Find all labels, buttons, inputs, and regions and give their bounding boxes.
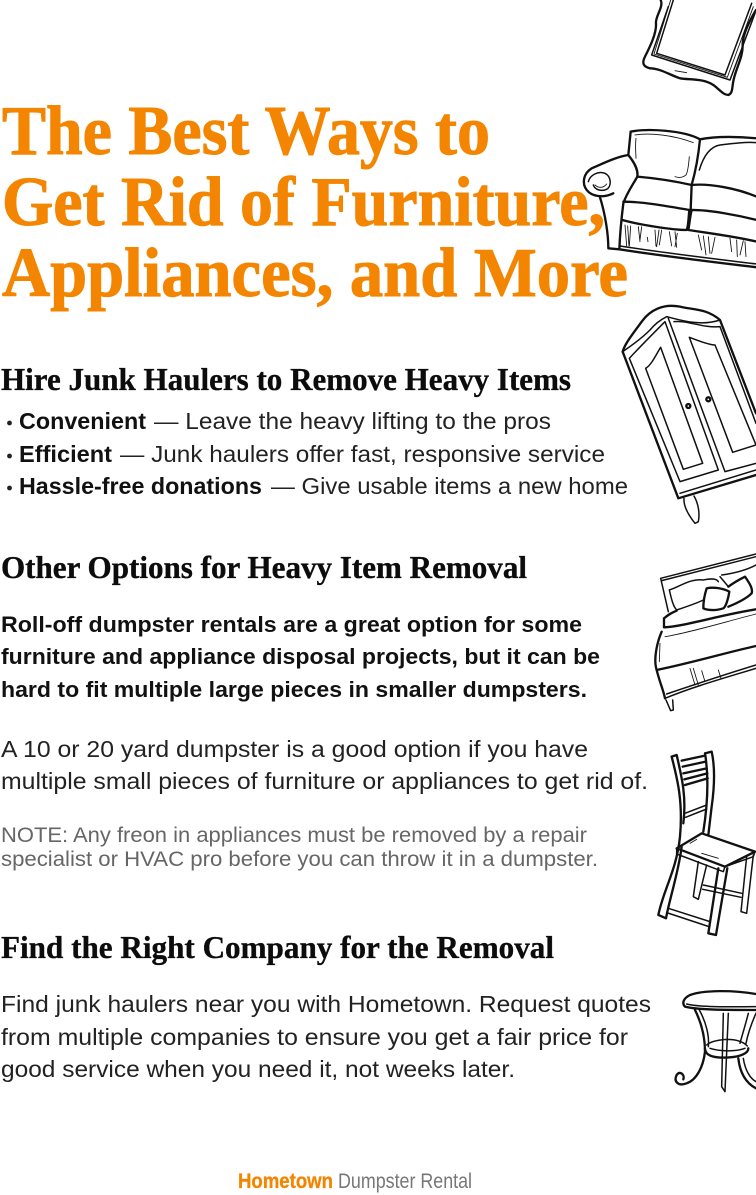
logo: Hometown <box>238 1170 333 1193</box>
heading: other options: Other Options for Heavy Item Removal <box>1 549 527 585</box>
icon: bed <box>655 554 756 711</box>
heading: find the right company: Find the Right Company for the Removal <box>1 929 554 965</box>
note: specialist or HVAC pro before you can throw it in a dumpster. <box>1 848 598 871</box>
section: find the right company <box>1 929 651 1082</box>
title <box>2 93 628 312</box>
paragraph <box>1 736 648 794</box>
bold paragraph: hard to fit multiple large pieces in smaller dumpsters. <box>1 677 587 702</box>
bullet list: — Leave the heavy lifting to the pros <box>154 408 551 434</box>
bullet list: Efficient <box>19 441 112 467</box>
icon: sofa <box>584 130 756 267</box>
title: Get Rid of Furniture, <box>2 164 605 241</box>
paragraph: from multiple companies to ensure you get a fair price for <box>1 1024 628 1050</box>
bullet list <box>7 408 628 499</box>
section: other options <box>1 549 648 871</box>
bold paragraph: Roll-off dumpster rentals are a great option for some <box>1 612 582 637</box>
paragraph: good service when you need it, not weeks later. <box>1 1056 515 1082</box>
bullet list: Hassle-free donations <box>19 473 262 499</box>
logo <box>238 1170 472 1193</box>
title: The Best Ways to <box>2 93 490 170</box>
bullet list: — Give usable items a new home <box>271 473 628 499</box>
note: NOTE: Any freon in appliances must be removed by a repair <box>1 824 587 847</box>
section: junk haulers <box>1 361 628 499</box>
paragraph <box>1 991 651 1082</box>
icon: chair <box>658 752 755 935</box>
paragraph: Find junk haulers near you with Hometown. Request quotes <box>1 991 651 1017</box>
title: Appliances, and More <box>2 235 628 312</box>
icon: wardrobe <box>623 306 756 523</box>
heading: hire junk haulers: Hire Junk Haulers to Remove Heavy Items <box>1 361 571 397</box>
logo: Dumpster Rental <box>338 1170 472 1193</box>
icon: mirror <box>643 0 756 95</box>
bullet list: — Junk haulers offer fast, responsive service <box>120 441 605 467</box>
bold paragraph <box>1 612 600 702</box>
bullet list: Convenient <box>19 408 146 434</box>
paragraph: multiple small pieces of furniture or appliances to get rid of. <box>1 768 648 794</box>
note <box>1 824 598 871</box>
bold paragraph: furniture and appliance disposal projects, but it can be <box>1 644 600 669</box>
paragraph: A 10 or 20 yard dumpster is a good option if you have <box>1 736 588 762</box>
icon: side table <box>676 991 756 1092</box>
